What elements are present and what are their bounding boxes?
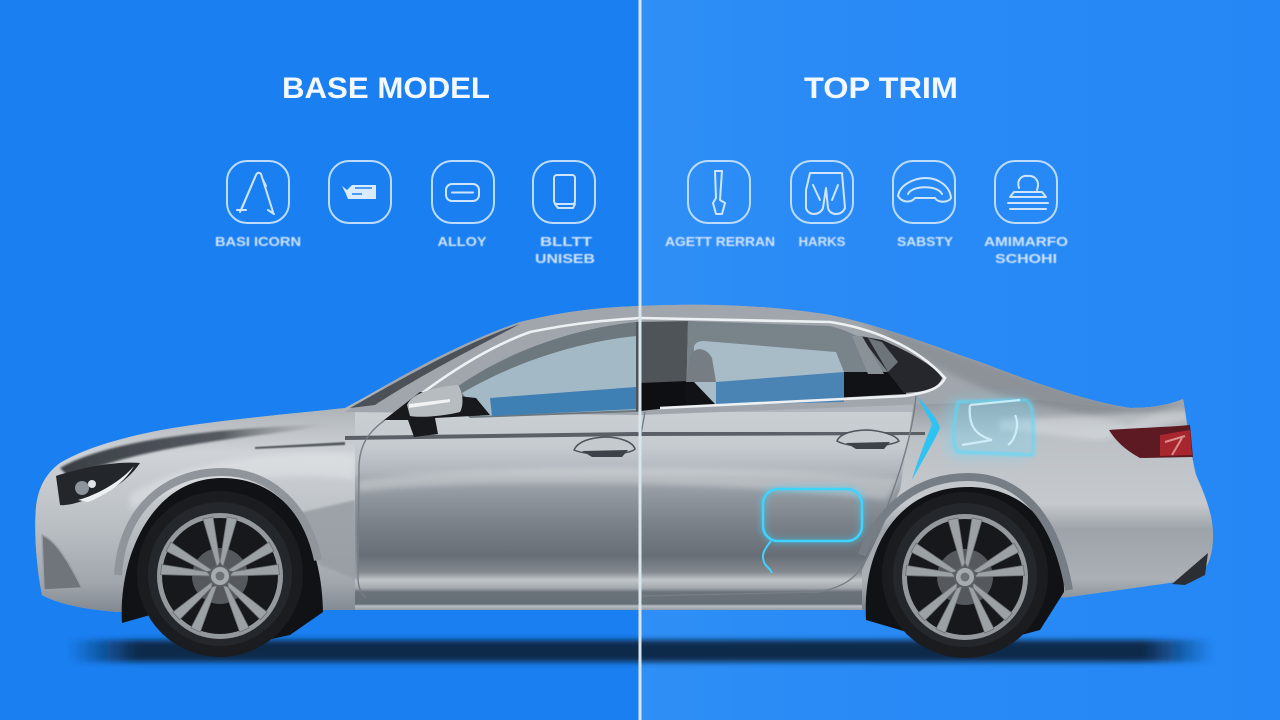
headlight <box>56 463 140 505</box>
front lower grille <box>42 535 82 590</box>
callout: door highlight <box>763 489 862 573</box>
callout: rear quarter highlight <box>945 398 1033 460</box>
door handle rear <box>837 430 899 449</box>
rear quarter window <box>860 336 942 393</box>
feature: safety screen: AGETT RERRAN <box>665 234 775 249</box>
feature: safety screen <box>665 161 775 249</box>
front wheel <box>137 491 303 657</box>
feature: alloy <box>432 161 494 249</box>
center divider <box>638 0 642 720</box>
feature: basic icon <box>215 161 301 249</box>
rear window glass <box>694 341 844 405</box>
feature: display <box>329 161 391 223</box>
window blue reflection <box>490 387 636 416</box>
car body <box>35 305 1213 612</box>
feature: phone <box>533 161 595 266</box>
rear exhaust <box>1172 553 1208 585</box>
rear wheel <box>882 492 1048 658</box>
ground shadow <box>68 640 1213 662</box>
panel: right background <box>640 0 1280 720</box>
panel: left background <box>0 0 640 720</box>
tail light <box>1109 425 1193 458</box>
front window glass <box>462 336 636 416</box>
seat headrest in window <box>686 349 716 382</box>
feature: seating <box>984 161 1068 266</box>
feature: phone: BLLTT <box>540 234 592 249</box>
feature: alloy: ALLOY <box>438 234 487 249</box>
feature: harness <box>791 161 853 249</box>
title: base model: BASE MODEL <box>282 72 490 105</box>
rear wheel arch <box>866 487 1064 650</box>
rear window blue reflection <box>716 372 844 405</box>
front wheel arch <box>122 478 323 650</box>
rear window outer <box>686 321 906 406</box>
feature: seating: AMIMARFO <box>984 234 1068 249</box>
body shading panels <box>30 300 1215 615</box>
car: side view sedan <box>30 300 1215 658</box>
rear window lower black <box>686 372 906 406</box>
pillars lower black <box>640 381 688 411</box>
rear arch lip <box>862 477 1069 590</box>
pillars <box>636 321 688 412</box>
feature: seating: SCHOHI <box>995 251 1057 266</box>
feature: phone: UNISEB <box>535 251 595 266</box>
roof edge dark strip <box>350 324 520 408</box>
title: top trim: TOP TRIM <box>804 72 958 105</box>
callout: cyan swoosh <box>912 396 940 480</box>
feature: safety: SABSTY <box>897 234 953 249</box>
side mirror <box>384 385 490 437</box>
feature: basic icon: BASI ICORN <box>215 234 301 249</box>
roof chrome trim <box>388 318 945 420</box>
front arch lip <box>118 472 318 575</box>
door handle front <box>574 437 635 457</box>
feature: safety <box>893 161 955 249</box>
door shut lines <box>358 396 916 598</box>
feature: harness: HARKS <box>798 234 846 249</box>
front window frame <box>445 322 636 418</box>
